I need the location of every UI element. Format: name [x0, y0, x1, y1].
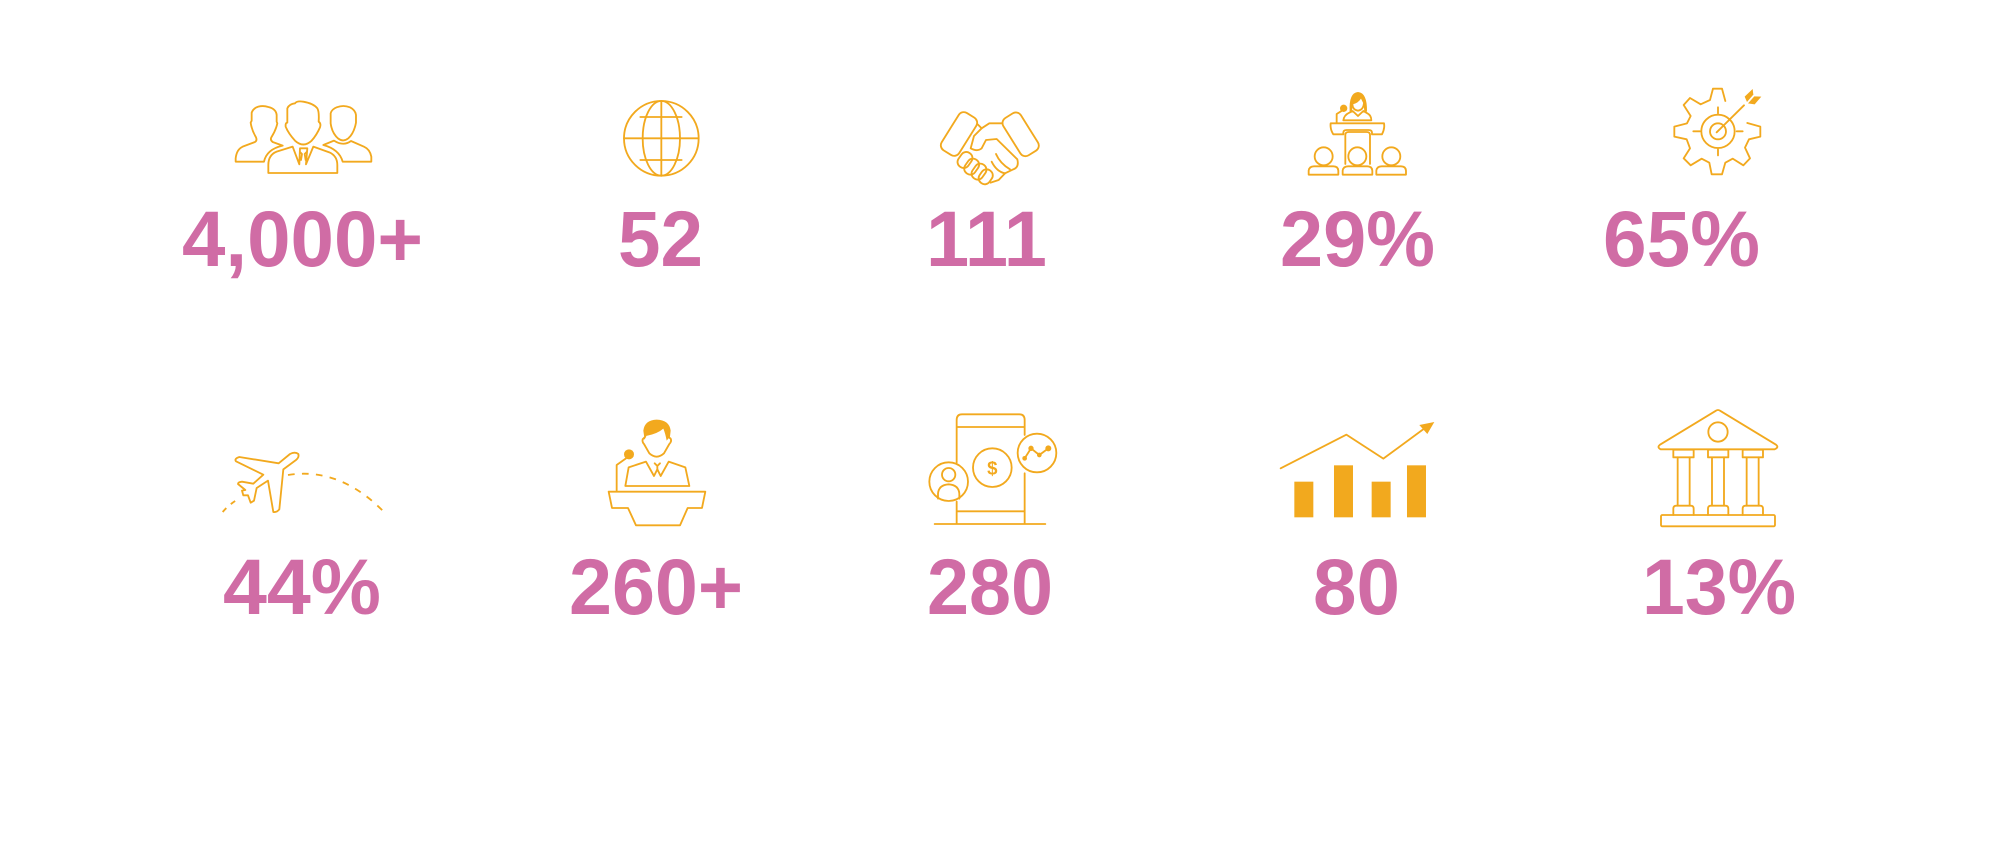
icon: phone with finance circles: $: [987, 457, 998, 478]
icon: presenter at lectern: [609, 420, 705, 525]
stat: 260+: 260+: [569, 542, 743, 631]
stat: 13%: 13%: [1642, 542, 1796, 631]
icon: classical bank building: [1658, 410, 1777, 526]
icon: handshake: [939, 110, 1041, 186]
icon: speaker at podium with audience: [1309, 92, 1406, 175]
icon: phone with finance circles: [929, 414, 1056, 524]
stat: 4,000+: 4,000+: [182, 194, 423, 283]
stat: 65%: 65%: [1603, 194, 1760, 283]
icon: rising bar chart with arrow: [1281, 422, 1434, 517]
icon: gear with target and arrow: [1674, 89, 1761, 174]
stat: 44%: 44%: [223, 542, 381, 631]
icon: team of three people: [236, 101, 371, 173]
stat: 280: 280: [927, 542, 1053, 631]
icon: globe: [624, 101, 699, 176]
stat: 111: 111: [926, 194, 1047, 283]
stat: 52: 52: [618, 194, 703, 283]
stat: 29%: 29%: [1280, 194, 1435, 283]
stat: 80: 80: [1313, 542, 1400, 631]
icon: airplane with dashed flight path: [223, 453, 385, 513]
